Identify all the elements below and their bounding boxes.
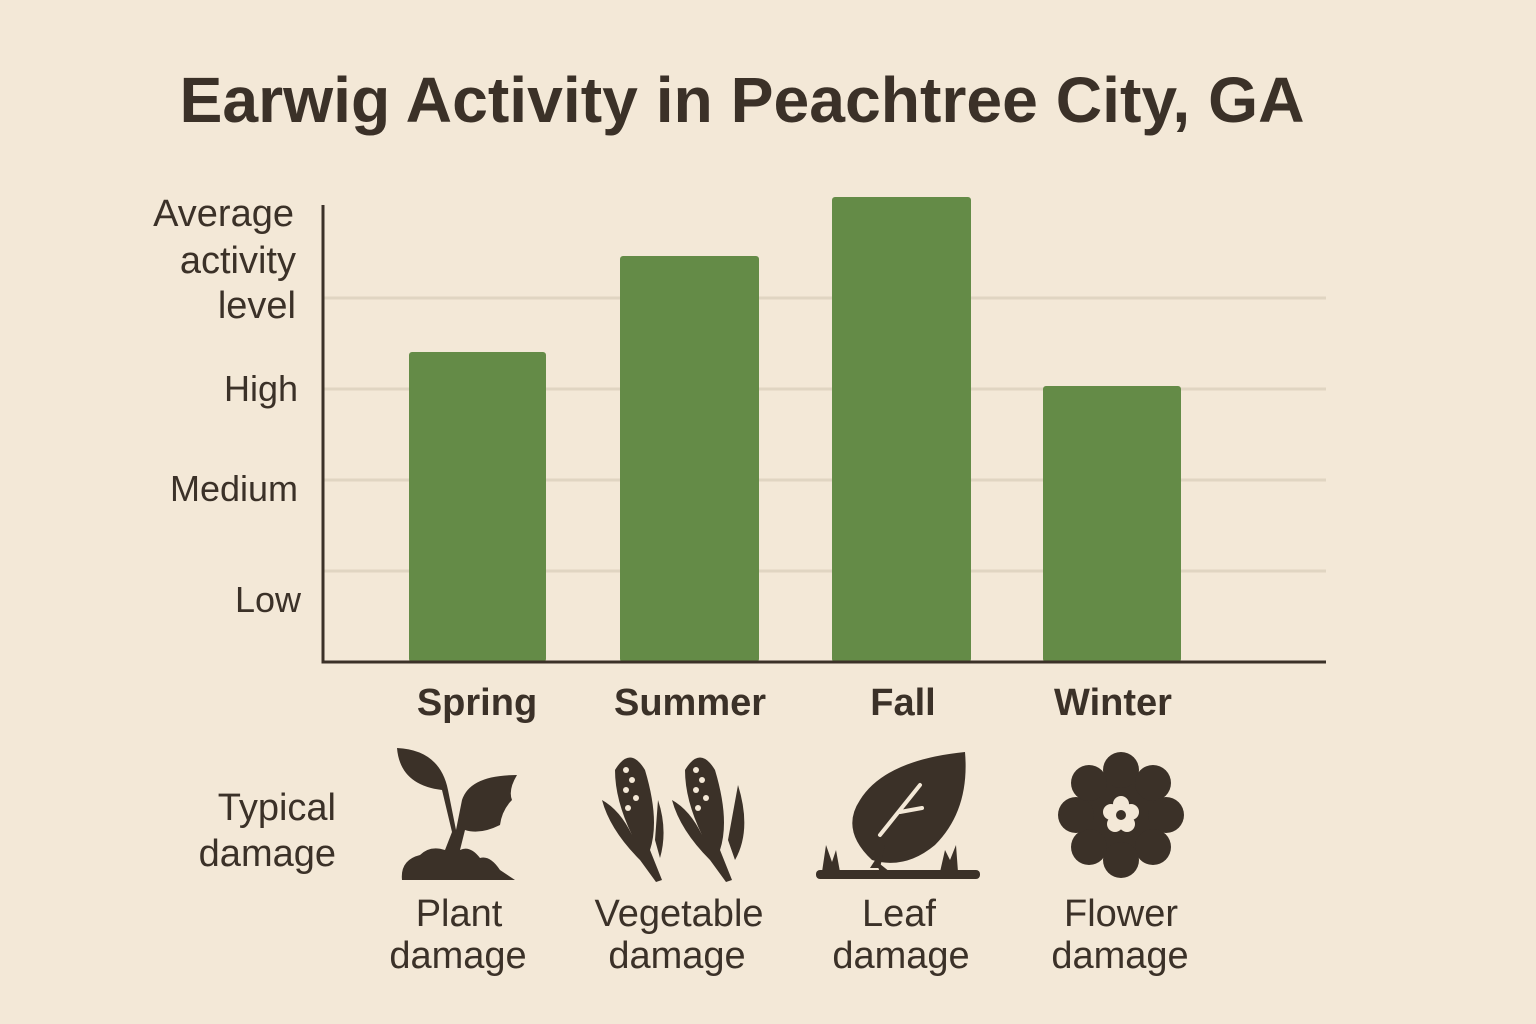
season labels: Fall [870, 682, 936, 724]
typical damage label: Typical [218, 787, 336, 829]
icon: plant [397, 748, 517, 880]
typical damage label [199, 787, 336, 875]
icon: corn [602, 758, 744, 882]
y axis labels [170, 368, 302, 620]
season labels: Spring [417, 682, 537, 724]
y axis title: activity [180, 240, 296, 282]
damage labels: damage [1051, 935, 1189, 977]
y axis title: Average [153, 193, 294, 235]
damage labels: damage [389, 935, 527, 977]
y axis title [153, 193, 296, 327]
damage labels [389, 893, 1189, 977]
typical damage label: damage [199, 833, 336, 875]
damage labels: Flower [1064, 893, 1178, 935]
damage labels: Vegetable [594, 893, 764, 935]
season labels [417, 682, 1172, 724]
season labels: Summer [614, 682, 766, 724]
damage labels: damage [608, 935, 746, 977]
damage labels: Leaf [862, 893, 936, 935]
bar chart [409, 197, 1181, 662]
y axis labels: Medium [170, 468, 298, 509]
axes [323, 205, 1326, 662]
damage labels: Plant [416, 893, 503, 935]
icon: flower [1058, 752, 1184, 878]
y axis title: level [218, 285, 296, 327]
damage labels: damage [832, 935, 970, 977]
icon: leaf [816, 752, 980, 879]
season labels: Winter [1054, 682, 1172, 724]
title: Earwig Activity in Peachtree City, GA [180, 64, 1304, 136]
y axis labels: Low [235, 579, 302, 620]
y axis labels: High [224, 368, 298, 409]
